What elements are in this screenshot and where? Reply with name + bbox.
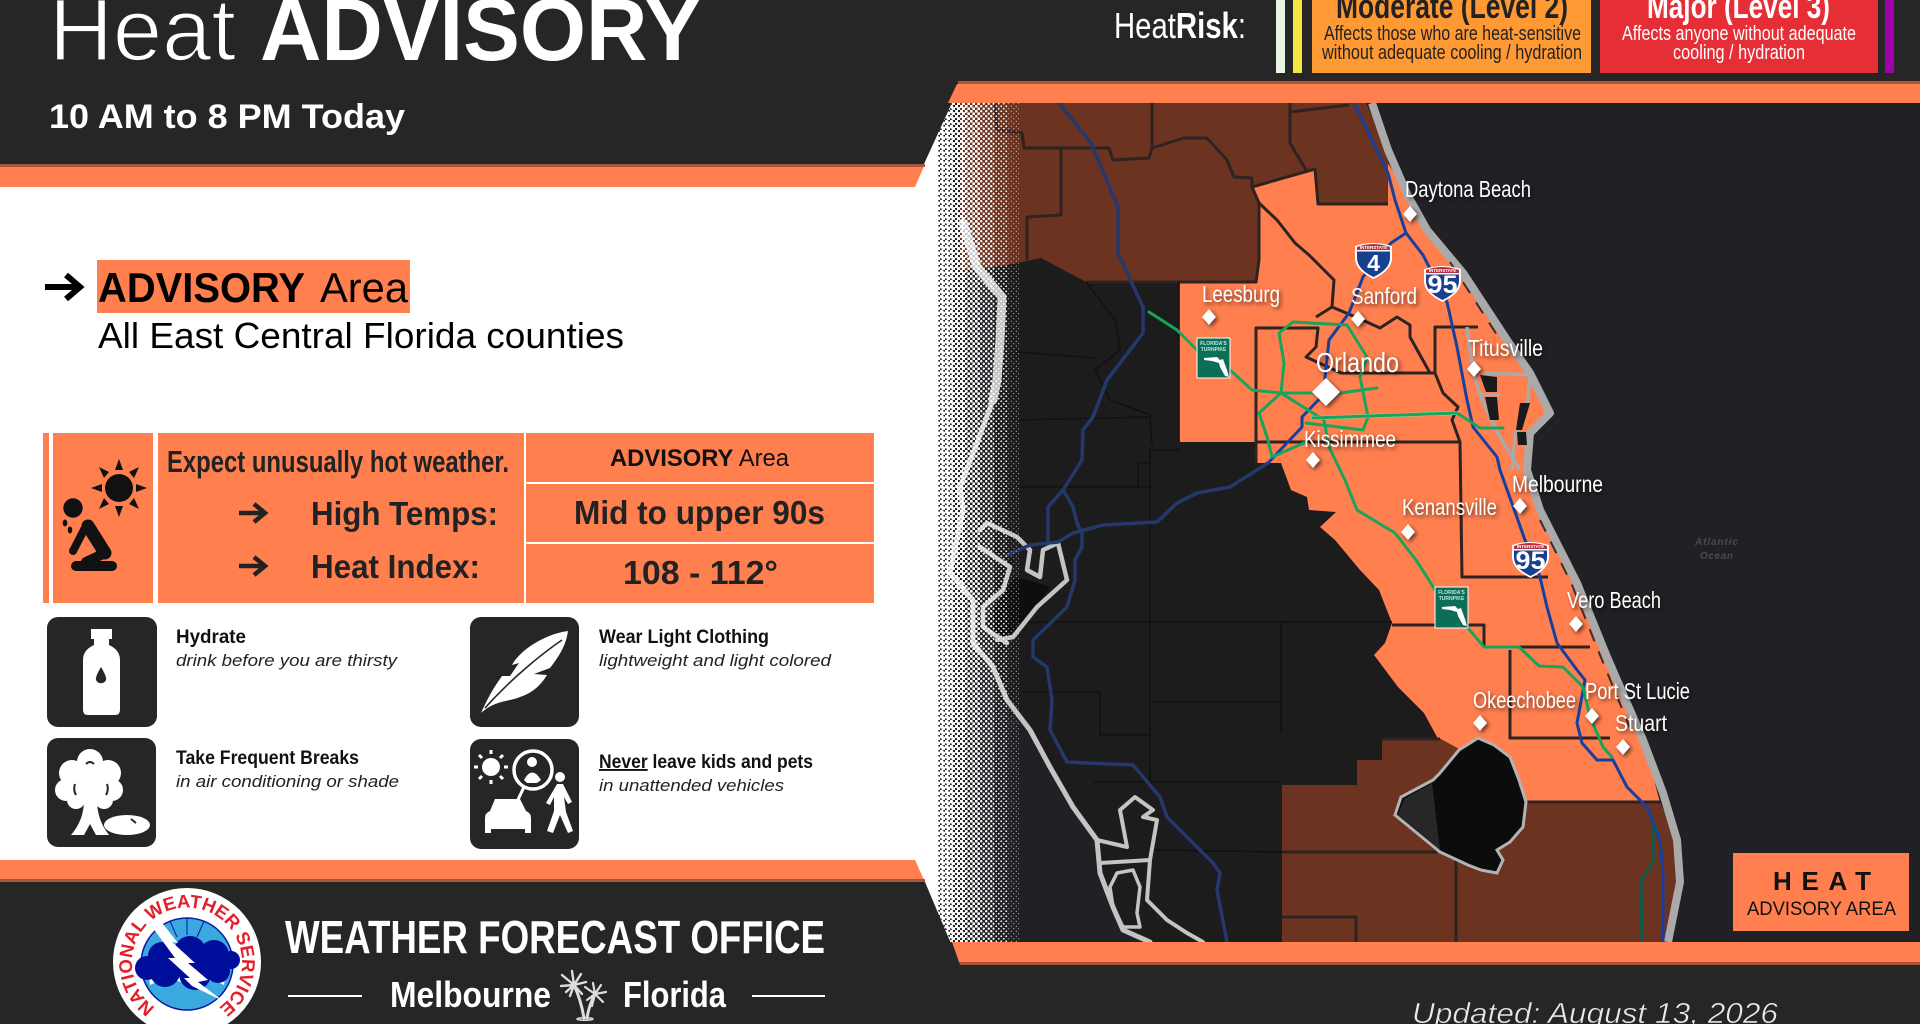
HeatRisk moderate box: [1312, 0, 1591, 73]
text: frequent breaks tip: in air conditioning or shade: [176, 772, 399, 791]
panel: expected heat table: [43, 433, 874, 603]
interstate highways: [1007, 103, 1663, 942]
text: frequent breaks tip: Take Frequent Breaks: [176, 748, 359, 769]
text: column header advisory area: ADVISORY Area: [610, 445, 790, 472]
turnpike and toll roads: [1149, 312, 1653, 942]
HeatRisk moderate box: without adequate cooling / hydration: [1321, 42, 1582, 64]
text: hydrate tip: Hydrate: [176, 627, 246, 648]
shield: interstate 95 north: 95: [1428, 271, 1458, 299]
text: hydrate tip: drink before you are thirsty: [176, 651, 399, 670]
Atlantic Ocean label: Ocean: [1700, 551, 1733, 562]
HeatRisk minor bars: [1276, 0, 1302, 73]
HeatRisk major box: [1600, 0, 1878, 73]
text: high temps label: High Temps:: [311, 495, 498, 532]
heading: advisory area: [97, 260, 410, 313]
bottom left orange band: [0, 860, 925, 882]
east coast barrier islands and lagoons: [1372, 103, 1680, 942]
sign: Florida's Turnpike south: TURNPIKE: [1439, 596, 1465, 602]
HeatRisk major box: cooling / hydration: [1673, 42, 1805, 64]
footer rule left: [288, 995, 362, 997]
city labels and markers: Leesburg: [1202, 281, 1280, 307]
sign: Florida's Turnpike south: [1435, 587, 1468, 628]
top dark header band: [0, 0, 1920, 164]
icon: person overheating in sun: [63, 459, 147, 566]
legend: heat advisory area: HEAT: [1773, 866, 1871, 896]
sign: Florida's Turnpike north: [1197, 338, 1230, 378]
text: hydrate tip: [176, 627, 399, 670]
text: heat index label: Heat Index:: [311, 548, 480, 585]
city labels and markers: Sanford: [1351, 283, 1417, 309]
sign: Florida's Turnpike north: FLORIDA'S: [1200, 341, 1228, 347]
city labels and markers: Daytona Beach: [1405, 176, 1531, 202]
shield: interstate 4: INTERSTATE: [1360, 245, 1387, 250]
panel: white text background: [0, 103, 938, 963]
city labels and markers: Port St Lucie: [1585, 678, 1690, 704]
footer text: Melbourne: Melbourne: [390, 974, 551, 1015]
text: never leave tip: [599, 752, 813, 795]
footer heading: weather forecast office: WEATHER FORECAST OFFICE: [285, 911, 825, 963]
top left orange band: [0, 164, 925, 187]
shield: interstate 95 south: [1512, 542, 1549, 578]
icon: sun, child, car and walker: [474, 750, 573, 833]
text: light clothing tip: [599, 627, 832, 670]
Lake Okeechobee: [1395, 738, 1526, 873]
city labels and markers: Stuart: [1615, 710, 1668, 736]
legend: heat advisory area: [1733, 853, 1909, 931]
footer rule right: [752, 995, 825, 997]
shield: interstate 95 south: INTERSTATE: [1517, 544, 1544, 549]
text: heat index value: 108 - 112°: [623, 554, 778, 591]
city labels and markers: Vero Beach: [1567, 587, 1661, 613]
city labels and markers: Melbourne: [1512, 471, 1603, 497]
Atlantic Ocean label: Atlantic: [1694, 537, 1738, 548]
HeatRisk label: HeatRisk:: [1114, 5, 1246, 46]
heading: advisory area: ADVISORY: [98, 264, 305, 311]
halftone fade over map edge: [938, 103, 1019, 942]
bottom dark footer: [0, 882, 1920, 1024]
text: light clothing tip: Wear Light Clothing: [599, 627, 769, 648]
text: frequent breaks tip: [176, 748, 399, 791]
arrow: heat index: [239, 557, 265, 575]
HeatRisk major box: Affects anyone without adequate: [1622, 23, 1856, 45]
southern brown counties outside advisory: [1282, 739, 1680, 942]
text: never leave tip: Never leave kids and pets: [599, 752, 813, 773]
arrow: advisory area: [45, 275, 80, 299]
arrow: high temps: [239, 504, 265, 522]
panel: map of east central Florida: [900, 103, 1920, 942]
northern brown counties outside advisory: [960, 103, 1388, 282]
shield: interstate 95 south: 95: [1516, 547, 1546, 575]
text: high temps value: Mid to upper 90s: [574, 494, 825, 531]
tile: hydrate: [47, 617, 399, 727]
city labels and markers: Okeechobee: [1473, 687, 1576, 713]
city labels and markers: Kenansville: [1402, 494, 1497, 520]
icon: tree and shade: [55, 749, 150, 835]
HeatRisk moderate box: Affects those who are heat-sensitive: [1324, 23, 1581, 45]
Atlantic Ocean label: [1695, 538, 1738, 559]
city labels and markers: Kissimmee: [1304, 426, 1396, 452]
top right orange band: [948, 84, 1920, 103]
text: light clothing tip: lightweight and light colored: [599, 651, 832, 670]
city labels and markers: Titusville: [1468, 335, 1543, 361]
tile: light clothing: [470, 617, 832, 727]
shield: interstate 4: [1355, 243, 1392, 279]
shield: interstate 95 north: INTERSTATE: [1429, 268, 1456, 273]
text: never leave tip: in unattended vehicles: [599, 776, 785, 795]
land mass: [938, 206, 954, 216]
icon: feather: [481, 631, 568, 713]
footer text: Florida: Florida: [623, 974, 727, 1015]
logo: National Weather Service: NATIONAL WEATHER SERVICE: [119, 894, 255, 1017]
shield: interstate 4: 4: [1367, 250, 1380, 276]
sign: Florida's Turnpike north: TURNPIKE: [1201, 347, 1227, 353]
shield: interstate 95 north: [1424, 266, 1461, 302]
bottom right orange band: [952, 942, 1920, 962]
sign: Florida's Turnpike south: FLORIDA'S: [1438, 590, 1466, 596]
advisory area counties in orange: [1179, 163, 1660, 802]
city labels and markers: Orlando: [1316, 347, 1399, 378]
tile: frequent breaks: [47, 738, 399, 847]
HeatRisk extreme bar: [1885, 0, 1894, 73]
city labels and markers: [1202, 176, 1690, 755]
icon: water bottle: [83, 629, 120, 715]
text: expect unusually hot weather: Expect unusually hot weather.: [167, 444, 509, 479]
icon: palm trees: [561, 971, 606, 1020]
legend: heat advisory area: ADVISORY AREA: [1747, 899, 1896, 920]
heading: advisory area: Area: [320, 264, 409, 311]
title: [49, 0, 701, 79]
tile: never leave kids and pets: [470, 739, 813, 849]
west coast and bay outlines: [950, 223, 1203, 942]
county boundary lines: [995, 103, 1660, 942]
text: all counties: All East Central Florida counties: [98, 315, 624, 356]
subtitle: timing: 10 AM to 8 PM Today: [49, 98, 405, 136]
